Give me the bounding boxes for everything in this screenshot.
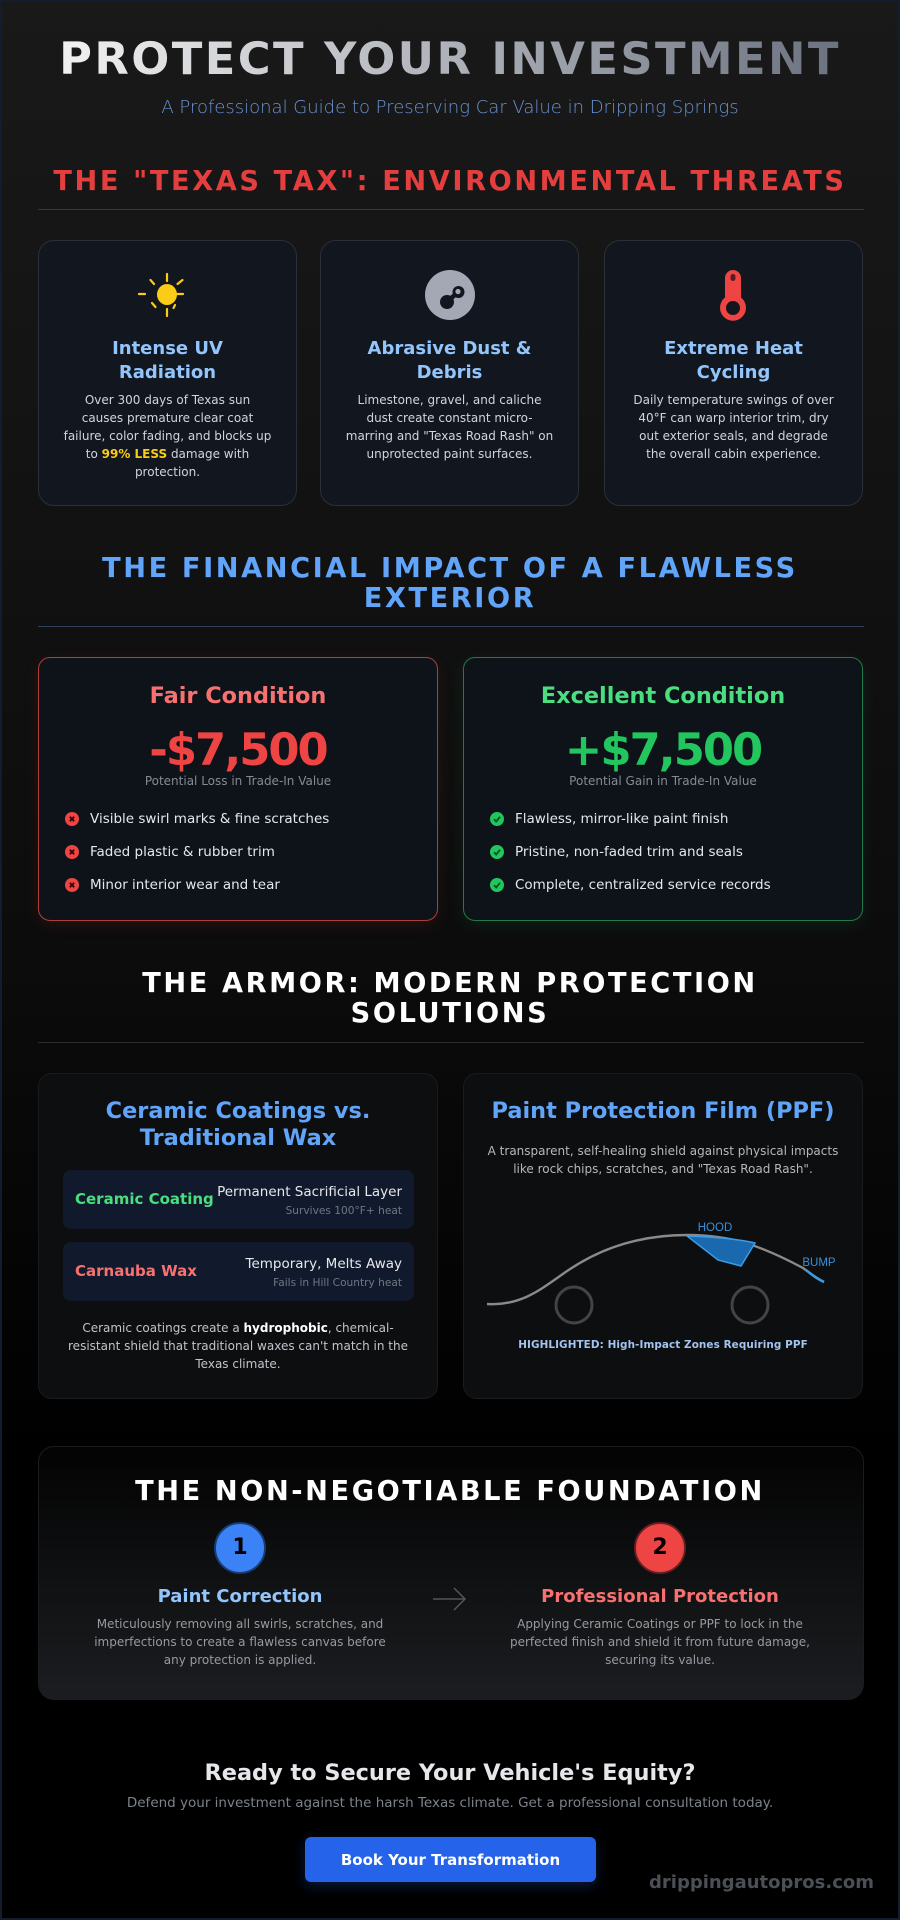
heading: the armor: SOLUTIONS — [351, 998, 549, 1029]
step 1 — [94, 1522, 386, 1667]
list item: Visible swirl marks & fine scratches — [90, 811, 329, 827]
step 2 — [510, 1522, 810, 1667]
comparison row: ceramic coating: Survives 100°F+ heat — [286, 1205, 402, 1217]
panel title: Traditional Wax — [140, 1125, 336, 1151]
card text: unprotected paint surfaces. — [367, 447, 532, 461]
title: PROTECT YOUR INVESTMENT — [59, 32, 841, 85]
button — [305, 1837, 596, 1882]
card text: protection. — [135, 465, 200, 479]
loss value: -$7,500 — [149, 723, 327, 776]
list item: Faded plastic & rubber trim — [90, 844, 275, 860]
comparison row: ceramic coating: Permanent Sacrificial Layer — [217, 1184, 402, 1200]
card title: Extreme Heat — [664, 338, 803, 359]
panel: intense UV radiation — [38, 240, 297, 506]
icon: sun — [138, 272, 184, 318]
comparison row: carnauba wax: Temporary, Melts Away — [246, 1256, 402, 1272]
heading: financial impact: EXTERIOR — [364, 583, 536, 614]
value caption: Potential Gain in Trade-In Value — [569, 774, 757, 788]
heading: the armor — [142, 968, 758, 1029]
call to action text: Defend your investment against the harsh Texas climate. Get a professional consultation today. — [127, 1795, 773, 1811]
heading: financial impact — [102, 553, 798, 614]
comparison row: ceramic coating: Ceramic Coating — [75, 1190, 214, 1208]
card title: Excellent Condition — [541, 683, 785, 709]
heading: financial impact: THE FINANCIAL IMPACT OF A FLAWLESS — [102, 553, 798, 584]
step title: Professional Protection — [541, 1586, 779, 1607]
heading: foundation: THE NON-NEGOTIABLE FOUNDATION — [135, 1476, 765, 1507]
label: BUMP — [802, 1257, 836, 1269]
card title — [664, 338, 803, 383]
step number: 2 — [652, 1535, 668, 1560]
list item: Pristine, non-faded trim and seals — [515, 844, 743, 860]
panel title: Ceramic Coatings vs. — [106, 1098, 370, 1124]
call to action heading: Ready to Secure Your Vehicle's Equity? — [205, 1760, 695, 1786]
step title: Paint Correction — [158, 1586, 322, 1607]
heading: the armor: THE ARMOR: MODERN PROTECTION — [142, 968, 758, 999]
card title — [112, 338, 223, 383]
paragraph — [68, 1321, 408, 1371]
card text — [633, 393, 834, 461]
card text: failure, color fading, and blocks up — [64, 429, 271, 443]
card title: Cycling — [697, 362, 770, 383]
heading: environmental threats: THE "TEXAS TAX": ENVIRONMENTAL THREATS — [53, 166, 847, 197]
card title: Radiation — [119, 362, 216, 383]
card text: to 99% LESS damage with — [86, 447, 249, 461]
diagram: car silhouette with PPF zones — [486, 1222, 836, 1324]
step text: Applying Ceramic Coatings or PPF to lock in the — [517, 1617, 803, 1631]
panel: abrasive dust and debris — [320, 240, 579, 506]
card title: Debris — [417, 362, 482, 383]
paragraph — [488, 1144, 838, 1176]
card text: the overall cabin experience. — [646, 447, 821, 461]
card text: Limestone, gravel, and caliche — [358, 393, 541, 407]
list item: Flawless, mirror-like paint finish — [515, 811, 728, 827]
card title: Intense UV — [112, 338, 223, 359]
value caption: Potential Loss in Trade-In Value — [145, 774, 331, 788]
card text — [346, 393, 553, 461]
panel: excellent condition — [463, 657, 863, 921]
card text: causes premature clear coat — [82, 411, 253, 425]
card text: marring and "Texas Road Rash" on — [346, 429, 553, 443]
comparison row: carnauba wax: Fails in Hill Country heat — [273, 1277, 402, 1289]
card title — [368, 338, 531, 383]
caption: HIGHLIGHTED: High-Impact Zones Requiring PPF — [518, 1339, 808, 1351]
panel: non-negotiable foundation — [38, 1446, 864, 1700]
step number — [634, 1522, 686, 1574]
step text: any protection is applied. — [164, 1653, 316, 1667]
subtitle: A Professional Guide to Preserving Car Value in Dripping Springs — [161, 97, 739, 118]
paragraph: Ceramic coatings create a hydrophobic, chemical- — [82, 1321, 394, 1335]
watermark: drippingautopros.com — [649, 1872, 874, 1893]
step text: imperfections to create a flawless canvas before — [94, 1635, 386, 1649]
list item: Complete, centralized service records — [515, 877, 771, 893]
card text: out exterior seals, and degrade — [639, 429, 828, 443]
panel title: Paint Protection Film (PPF) — [492, 1098, 834, 1124]
step text — [94, 1617, 386, 1667]
icon: dust particles — [425, 270, 475, 320]
step number: 1 — [232, 1535, 248, 1560]
step text: Meticulously removing all swirls, scratches, and — [97, 1617, 383, 1631]
card title: Fair Condition — [150, 683, 326, 709]
card text: 40°F can warp interior trim, dry — [638, 411, 829, 425]
button: Book Your Transformation — [341, 1851, 560, 1869]
step number — [214, 1522, 266, 1574]
panel: paint protection film — [463, 1073, 863, 1399]
panel: ceramic coatings vs wax — [38, 1073, 438, 1399]
wheels — [556, 1287, 768, 1323]
list item: Minor interior wear and tear — [90, 877, 280, 893]
arrow — [433, 1588, 466, 1610]
panel: extreme heat cycling — [604, 240, 863, 506]
label: HOOD — [698, 1222, 732, 1234]
paragraph: like rock chips, scratches, and "Texas Road Rash". — [513, 1162, 813, 1176]
comparison row: carnauba wax — [63, 1242, 414, 1301]
paragraph: Texas climate. — [195, 1357, 281, 1371]
card text: Daily temperature swings of over — [633, 393, 834, 407]
card text: Over 300 days of Texas sun — [85, 393, 250, 407]
card text — [64, 393, 271, 479]
paragraph: A transparent, self-healing shield against physical impacts — [488, 1144, 838, 1158]
paragraph: resistant shield that traditional waxes can't match in the — [68, 1339, 408, 1353]
comparison row: ceramic coating — [63, 1170, 414, 1229]
comparison row: carnauba wax: Carnauba Wax — [75, 1262, 197, 1280]
step text: perfected finish and shield it from future damage, — [510, 1635, 810, 1649]
icon: thermometer — [720, 270, 746, 321]
card title: Abrasive Dust & — [368, 338, 531, 359]
panel title — [106, 1098, 370, 1151]
step text: securing its value. — [605, 1653, 715, 1667]
step text — [510, 1617, 810, 1667]
card text: dust create constant micro- — [366, 411, 533, 425]
panel: fair condition — [38, 657, 438, 921]
gain value: +$7,500 — [565, 723, 761, 776]
